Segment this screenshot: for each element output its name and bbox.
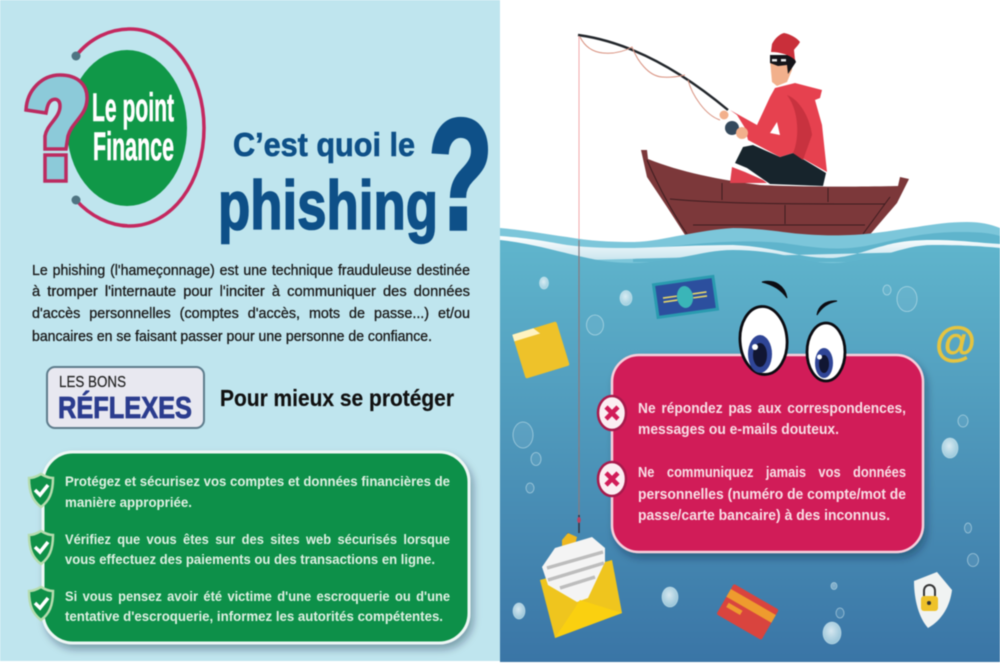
warning text: Ne communiquez jamais vos données (638, 465, 906, 481)
badge: les bons réflexes: LES BONS (59, 374, 126, 391)
bubbles (513, 277, 978, 644)
icon: cross 1 (598, 396, 626, 430)
title: C'est quoi le phishing ?: ? (428, 87, 493, 263)
badge: les bons réflexes: RÉFLEXES (58, 390, 192, 425)
icon: shield with padlock (914, 572, 952, 628)
text block: definition: d'accès personnelles (comptes d'accès, mots de passe...) et/ou (32, 306, 470, 322)
logo: Le point Finance: Finance (93, 125, 174, 169)
warning text (638, 401, 906, 524)
advice text: Si vous pensez avoir été victime d'une escroquerie ou d'une (65, 588, 450, 604)
hat (771, 33, 800, 60)
hands and reel (725, 121, 739, 135)
advice text (65, 473, 450, 624)
warning text: Ne répondez pas aux correspondences, (638, 401, 906, 417)
icon: check shield 3 (29, 587, 53, 620)
illustration: boat (641, 150, 909, 238)
icon: banknote (652, 275, 719, 319)
panel: green advice box (29, 452, 469, 643)
icon: credit card (716, 584, 779, 640)
text block: definition: Le phishing (l'hameçonnage) est une technique frauduleuse destinée (32, 263, 470, 279)
icon: hook (568, 515, 581, 540)
face (770, 60, 792, 86)
title: C'est quoi le phishing ?: C’est quoi le (233, 126, 415, 163)
warning text: personnelles (numéro de compte/mot de (638, 487, 906, 503)
illustration: eyes (738, 281, 845, 381)
illustration: fisherman (720, 33, 827, 186)
heading: pour mieux se protéger: Pour mieux se protéger (220, 385, 454, 411)
title: C'est quoi le phishing ?: phishing (218, 167, 438, 244)
logo: Le point Finance: Le point (92, 86, 174, 130)
hoodie (730, 83, 827, 172)
text block: definition (32, 263, 470, 345)
gap between arm and body (770, 122, 780, 135)
pants (735, 145, 826, 186)
illustration: fishing rod (578, 35, 728, 240)
advice text: Protégez et sécurisez vos comptes et données financières de (65, 473, 450, 489)
fishing line underwater (578, 240, 580, 515)
warning text: messages ou e-mails douteux. (638, 422, 839, 438)
panel: warning box (598, 355, 923, 552)
icon: check shield 1 (29, 474, 53, 507)
mask eye holes (772, 59, 786, 62)
hoodie shadow (787, 95, 812, 160)
icon: check shield 2 (29, 531, 53, 564)
badge: les bons réflexes (47, 367, 204, 428)
panel: left background (0, 0, 500, 661)
boots (730, 167, 767, 183)
text block: definition: à tromper l'internaute pour l'inciter à communiquer des données (32, 284, 470, 300)
warning text: passe/carte bancaire) à des inconnus. (638, 508, 890, 524)
logo: Le point Finance (26, 29, 204, 226)
advice text: Vérifiez que vous êtes sur des sites web sécurisés lorsque (65, 531, 450, 547)
icon: folder (512, 321, 570, 379)
advice text: vous effectuez des paiements ou des transactions en ligne. (65, 551, 435, 567)
icon: at sign: @ (935, 318, 976, 365)
advice text: manière appropriée. (65, 494, 192, 510)
mask and hair (770, 55, 796, 74)
icon: cross 2 (598, 462, 626, 496)
text block: definition: bancaires en se faisant passer pour une personne de confiance. (32, 329, 432, 345)
illustration: sea (500, 222, 1000, 662)
advice text: tentative d'escroquerie, informez les autorités compétentes. (65, 608, 443, 624)
icon: envelope (540, 533, 622, 638)
title: C'est quoi le phishing ? (218, 87, 493, 263)
